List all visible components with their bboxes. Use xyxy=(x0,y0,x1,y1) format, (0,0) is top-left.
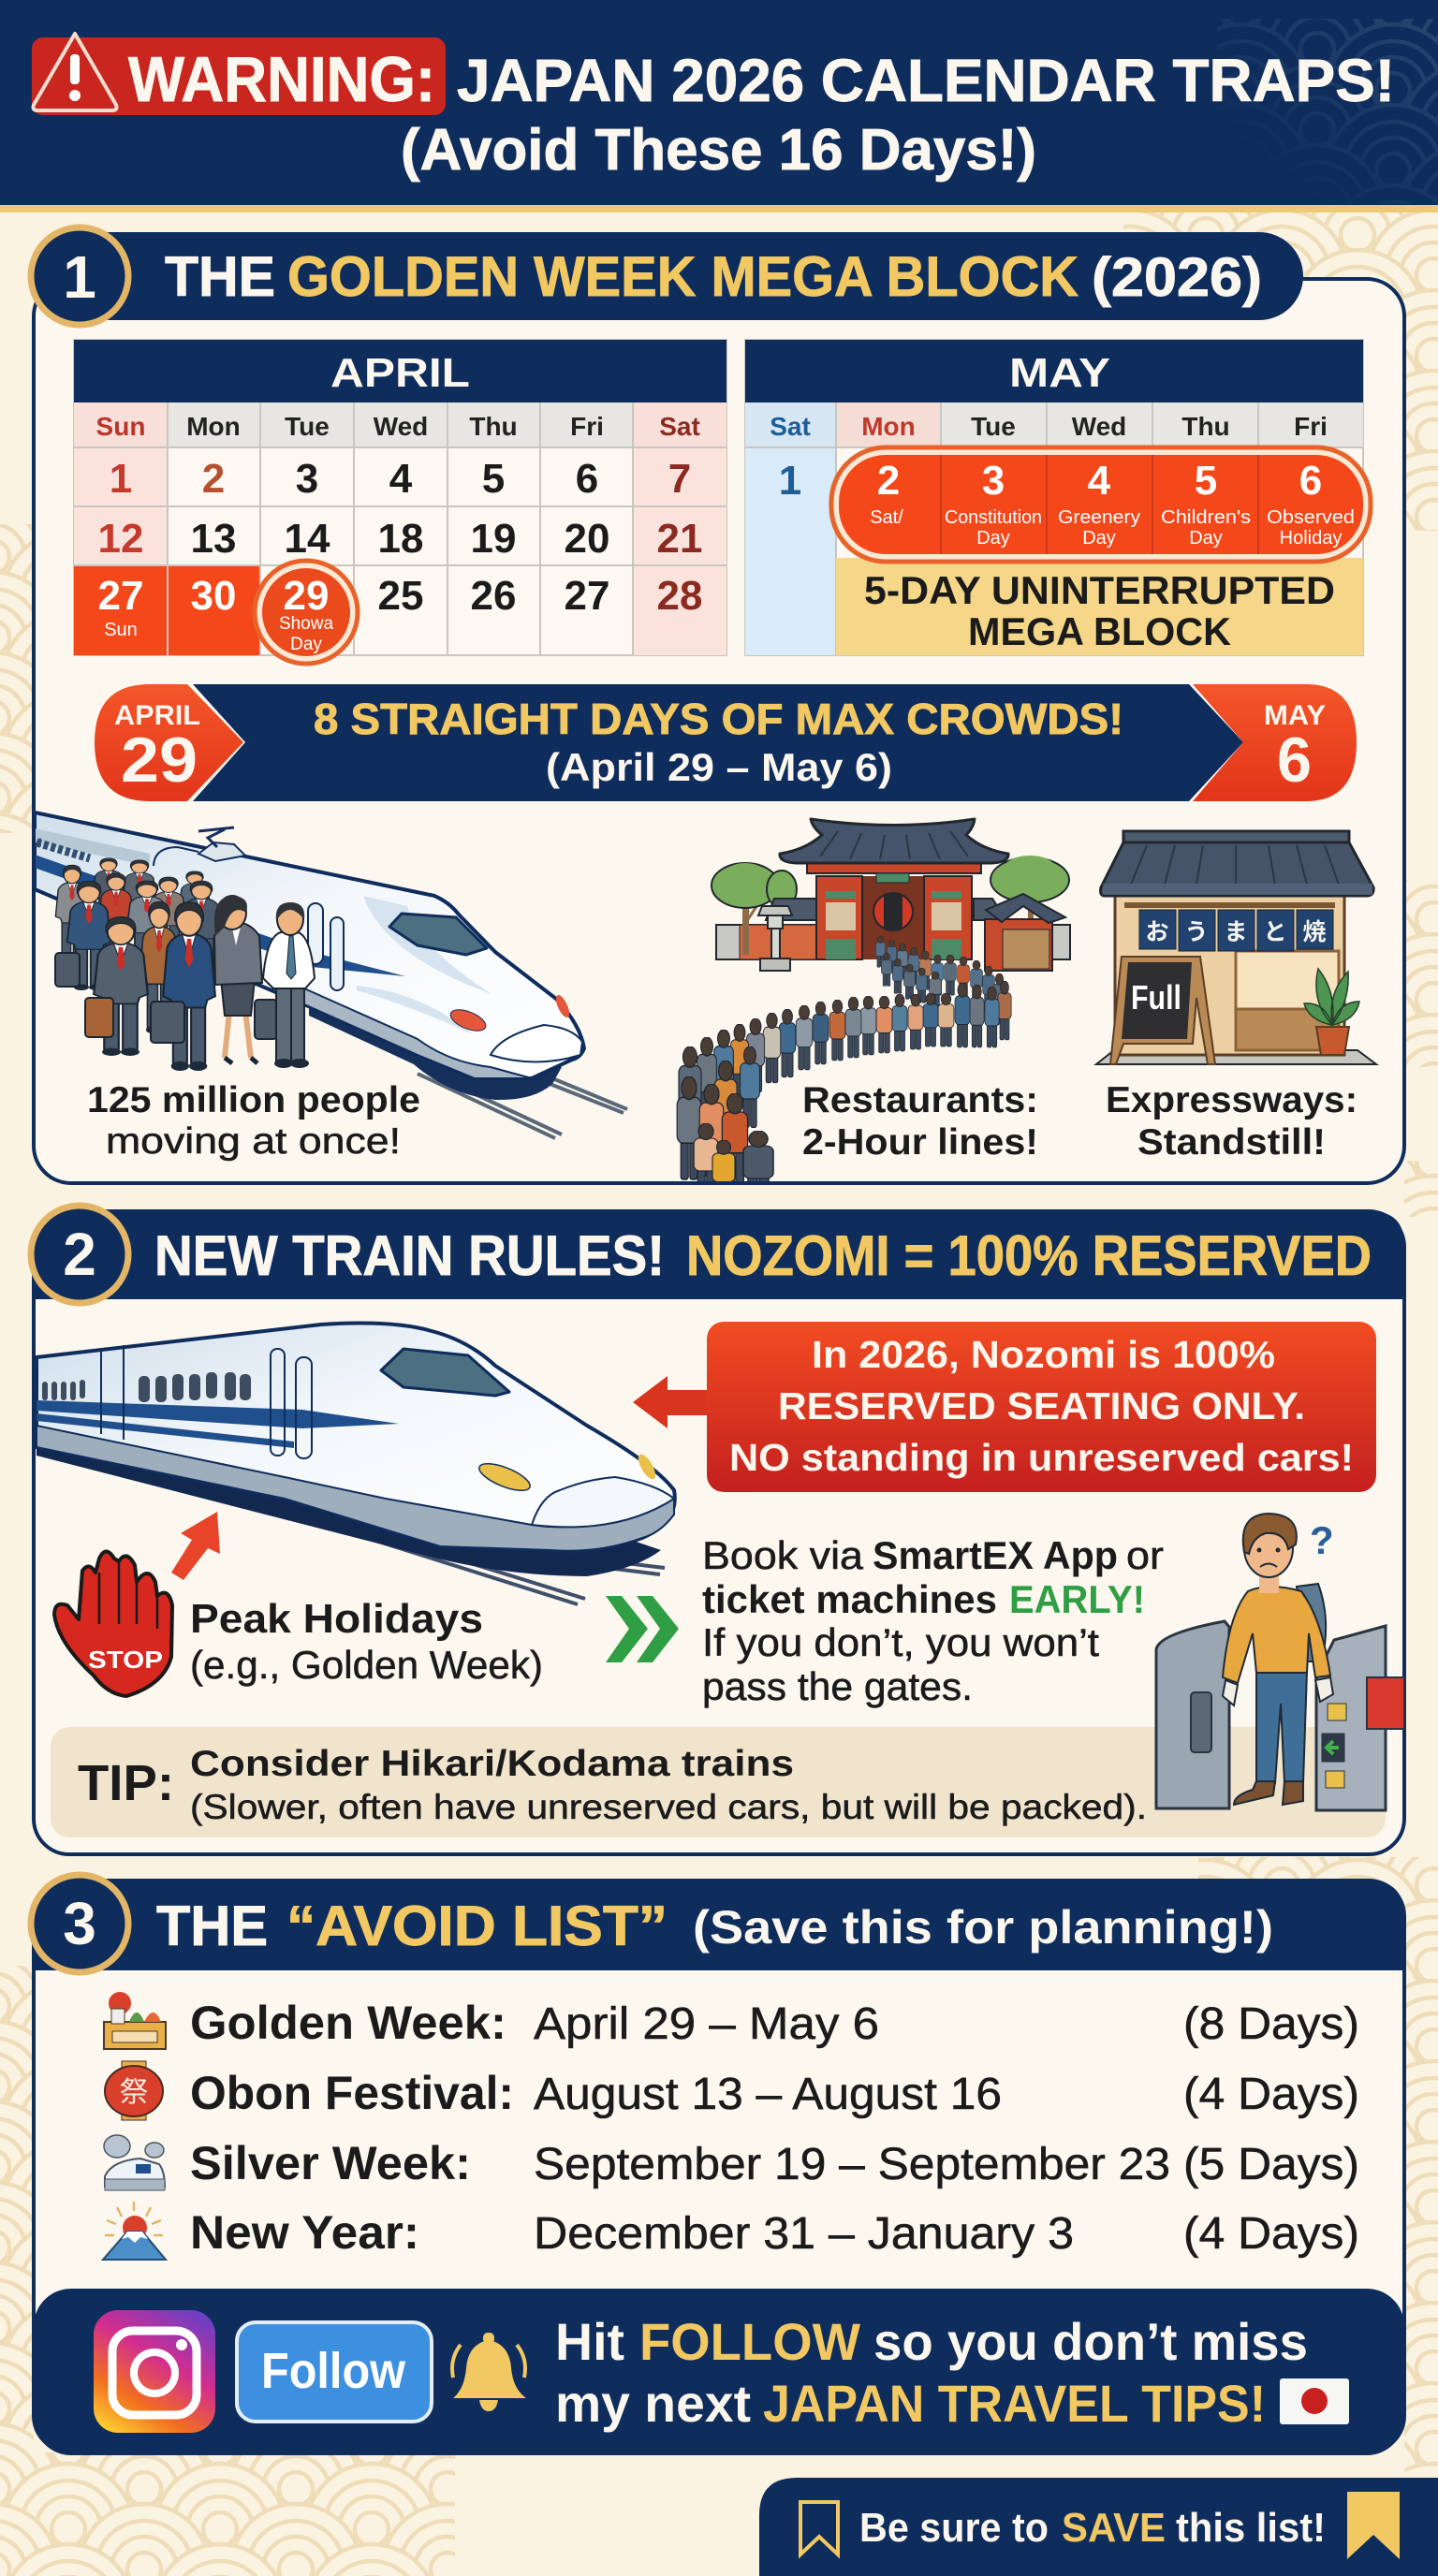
text: booking advice: SmartEX App xyxy=(873,1533,1118,1577)
illustration: nozomi train xyxy=(37,1324,675,1604)
icon: green double chevron xyxy=(606,1596,679,1662)
april calendar: 26 xyxy=(471,573,516,619)
5-day holiday pill: Children's xyxy=(1161,507,1251,528)
april calendar: Sun xyxy=(104,620,138,640)
Full sign board xyxy=(1110,957,1215,1064)
illustration: shinkansen and commuter crowd xyxy=(35,812,627,1138)
5-day holiday pill: Day xyxy=(976,528,1010,549)
april calendar: 1 xyxy=(110,456,132,502)
side hall xyxy=(985,894,1065,971)
april calendar: APRIL xyxy=(330,350,470,396)
5-day holiday pill: Observed xyxy=(1267,507,1355,528)
mega block label: 5-DAY UNINTERRUPTED xyxy=(864,568,1335,612)
caption: 125 million people: 125 million people xyxy=(87,1080,420,1120)
may 6 tag xyxy=(1193,684,1357,801)
april calendar: 2 xyxy=(202,456,225,502)
row: obon festival: Obon Festival: xyxy=(190,2067,514,2119)
row: silver week: (5 Days) xyxy=(1183,2140,1359,2189)
section 1 heading: GOLDEN WEEK MEGA BLOCK xyxy=(287,245,1078,308)
crowd of commuters xyxy=(55,858,315,1071)
tracks xyxy=(418,1070,627,1138)
section 2 heading: NOZOMI = 100% RESERVED xyxy=(686,1224,1372,1287)
section 2 heading xyxy=(31,1206,1404,1303)
mega block label xyxy=(836,558,1363,655)
date range banner: 8 STRAIGHT DAYS OF MAX CROWDS! xyxy=(314,695,1123,743)
april calendar: Thu xyxy=(469,412,518,441)
gate body xyxy=(807,862,981,959)
icon: bento box xyxy=(104,1992,166,2049)
april calendar: 4 xyxy=(389,456,413,502)
follow button: Follow xyxy=(261,2343,406,2399)
row: silver week: Silver Week: xyxy=(190,2137,471,2189)
section 3 heading: (Save this for planning!) xyxy=(693,1901,1273,1954)
text: booking advice: Book via xyxy=(702,1533,864,1577)
text: booking advice: or xyxy=(1126,1533,1164,1577)
follow button xyxy=(237,2322,432,2422)
may calendar: 1 xyxy=(779,458,801,504)
row: obon festival: (4 Days) xyxy=(1183,2070,1359,2119)
save this list bar xyxy=(759,2478,1438,2576)
title line 2: (Avoid These 16 Days!) xyxy=(401,118,1036,183)
noren curtain: う xyxy=(1184,919,1209,945)
may calendar: Thu xyxy=(1181,412,1230,441)
noren curtain: と xyxy=(1263,919,1287,945)
text: peak holidays xyxy=(190,1596,543,1687)
row: golden week xyxy=(104,1992,1359,2049)
row: obon festival xyxy=(105,2061,1359,2120)
5-day holiday pill: 4 xyxy=(1088,458,1111,504)
briefcase xyxy=(85,998,113,1037)
april calendar: 28 xyxy=(657,573,702,619)
briefcase xyxy=(151,1002,184,1043)
follow message: JAPAN TRAVEL TIPS! xyxy=(763,2374,1266,2433)
caption: restaurants xyxy=(802,1080,1038,1163)
panel: section 1 golden week xyxy=(31,227,1404,1205)
section 1 heading: THE xyxy=(165,245,275,308)
caption: 125 million people: moving at once! xyxy=(106,1121,401,1162)
april calendar: 25 xyxy=(378,573,423,619)
temple roof xyxy=(780,819,1008,863)
may calendar: Wed xyxy=(1072,412,1126,441)
april calendar: 20 xyxy=(565,516,609,562)
row: golden week: April 29 – May 6 xyxy=(534,1999,879,2049)
title line 1: WARNING: xyxy=(128,44,435,115)
5-day holiday pill: 6 xyxy=(1299,458,1322,504)
5-day holiday pill: Greenery xyxy=(1058,507,1140,528)
caption: restaurants: 2-Hour lines! xyxy=(802,1122,1038,1163)
icon: stop hand xyxy=(54,1552,172,1696)
follow message: FOLLOW xyxy=(639,2312,860,2371)
april calendar: Wed xyxy=(374,412,428,441)
panel: section 2 train rules xyxy=(31,1206,1404,1854)
follow message: my next xyxy=(555,2374,751,2433)
woman in grey suit xyxy=(214,896,262,1063)
row: silver week: September 19 – September 23 xyxy=(534,2140,1170,2189)
date range banner xyxy=(95,684,1357,801)
5-day holiday pill: Sat/ xyxy=(870,507,903,528)
illustration: temple gate xyxy=(712,819,1070,971)
worried traveller: ? xyxy=(1310,1518,1334,1562)
header banner xyxy=(0,0,1438,212)
caption: 125 million people xyxy=(87,1080,420,1162)
5-day holiday pill: Day xyxy=(1082,528,1116,549)
icon: mount fuji sunrise xyxy=(103,2202,166,2260)
may calendar: Sat xyxy=(770,412,811,441)
text: booking advice: ticket machines xyxy=(702,1577,997,1621)
5-day holiday pill: 5 xyxy=(1195,458,1217,504)
save message: this list! xyxy=(1176,2505,1326,2551)
april calendar: Sat xyxy=(659,412,700,441)
tip box: TIP: xyxy=(78,1755,174,1811)
trees xyxy=(712,856,1069,955)
april calendar: 5 xyxy=(482,456,505,502)
section 3 heading: 3 xyxy=(63,1890,96,1957)
caption: expressways: Standstill! xyxy=(1137,1122,1326,1163)
text: booking advice: EARLY! xyxy=(1009,1577,1145,1621)
date range banner: (April 29 – May 6) xyxy=(546,745,892,789)
ticket gate right xyxy=(1316,1626,1404,1810)
row: silver week xyxy=(104,2135,1359,2190)
Full sign board: Full xyxy=(1131,978,1181,1017)
5-day holiday pill: Holiday xyxy=(1280,528,1342,549)
icon: japan flag xyxy=(1280,2378,1349,2424)
april calendar: 19 xyxy=(471,516,516,562)
may 6 tag: MAY xyxy=(1264,700,1326,731)
callout: reserved seating: NO standing in unreserved cars! xyxy=(729,1436,1354,1479)
ticket gate left xyxy=(1156,1621,1229,1808)
may calendar: MAY xyxy=(1009,350,1110,396)
5-day holiday pill xyxy=(831,447,1371,562)
may calendar xyxy=(745,340,1371,655)
panel: section 3 avoid list xyxy=(31,1875,1404,2452)
april 29 tag xyxy=(95,684,243,801)
section 1 heading xyxy=(31,227,1303,325)
section 3 heading: THE xyxy=(156,1895,268,1957)
april calendar xyxy=(74,340,726,664)
5-day holiday pill: Day xyxy=(1189,528,1223,549)
briefcase xyxy=(255,1000,277,1039)
april calendar: 6 xyxy=(576,456,598,502)
april calendar: 7 xyxy=(668,456,691,502)
5-day holiday pill: Constitution xyxy=(945,507,1042,528)
text: peak holidays: Peak Holidays xyxy=(190,1596,483,1642)
highlighted day 29 Showa Day xyxy=(255,561,358,664)
caption: expressways: Expressways: xyxy=(1106,1080,1357,1120)
section 3 heading xyxy=(31,1875,1404,1972)
5-day holiday pill: 3 xyxy=(982,458,1005,504)
row: new year xyxy=(103,2202,1359,2260)
april calendar: Mon xyxy=(186,412,241,441)
highlighted day 29 Showa Day: 29 xyxy=(284,573,329,619)
illustration: traveller at ticket gates xyxy=(1156,1514,1404,1810)
warning red label xyxy=(32,37,446,115)
icon: warning triangle xyxy=(34,34,116,110)
icon: stop hand: STOP xyxy=(88,1646,163,1674)
row: new year: (4 Days) xyxy=(1183,2209,1359,2259)
april calendar: 30 xyxy=(191,573,236,619)
save message: Be sure to xyxy=(859,2505,1049,2551)
row: new year: New Year: xyxy=(190,2206,419,2259)
may calendar: Fri xyxy=(1294,412,1328,441)
icon: festival lantern xyxy=(105,2061,163,2120)
stone lantern xyxy=(758,906,792,971)
april calendar: 14 xyxy=(285,516,330,562)
worried traveller xyxy=(1223,1514,1334,1805)
icon: festival lantern: 祭 xyxy=(120,2077,148,2108)
icon: gold bookmark xyxy=(1347,2492,1400,2559)
may calendar: Mon xyxy=(861,412,916,441)
april 29 tag: APRIL xyxy=(114,700,200,731)
noren curtain: お xyxy=(1145,919,1169,945)
section 1 heading: (2026) xyxy=(1092,247,1262,308)
april calendar: 27 xyxy=(98,573,143,619)
april calendar: Tue xyxy=(285,412,330,441)
callout: reserved seating: In 2026, Nozomi is 100% xyxy=(812,1333,1275,1376)
save message xyxy=(859,2505,1326,2551)
potted plant xyxy=(1304,969,1359,1055)
callout: reserved seating: RESERVED SEATING ONLY. xyxy=(778,1384,1305,1427)
callout: reserved seating xyxy=(633,1322,1376,1492)
icon: instagram xyxy=(94,2310,215,2433)
may 6 tag: 6 xyxy=(1277,724,1312,796)
side roof xyxy=(766,899,1006,920)
april calendar: Sun xyxy=(96,412,145,441)
highlighted day 29 Showa Day: Showa xyxy=(279,614,333,634)
follow message: so you don’t miss xyxy=(873,2312,1308,2371)
april calendar: 3 xyxy=(296,456,318,502)
april calendar: 13 xyxy=(191,516,236,562)
row: obon festival: August 13 – August 16 xyxy=(534,2070,1002,2119)
noren curtain xyxy=(1139,910,1333,951)
noren curtain: 焼 xyxy=(1302,919,1327,945)
row: golden week: (8 Days) xyxy=(1183,1999,1359,2049)
icon: bell xyxy=(452,2333,526,2411)
april calendar: 27 xyxy=(565,573,609,619)
section 2 heading: 2 xyxy=(63,1221,96,1288)
text: peak holidays: (e.g., Golden Week) xyxy=(190,1643,543,1687)
april calendar: 21 xyxy=(657,516,702,562)
highlighted day 29 Showa Day: Day xyxy=(290,635,322,654)
5-day holiday pill: 2 xyxy=(877,458,900,504)
text: booking advice: pass the gates. xyxy=(702,1664,973,1708)
april calendar: Fri xyxy=(570,412,604,441)
temple walls xyxy=(716,925,816,959)
noren curtain: ま xyxy=(1224,919,1248,945)
arrow: to train xyxy=(171,1512,220,1580)
icon: bookmark outline xyxy=(800,2502,838,2554)
tip box: (Slower, often have unreserved cars, but will be packed). xyxy=(190,1788,1147,1826)
text: booking advice: If you don’t, you won’t xyxy=(702,1620,1099,1664)
header banner: JAPAN 2026 CALENDAR TRAPS! xyxy=(457,47,1395,114)
man in white shirt xyxy=(263,902,315,1068)
row: golden week: Golden Week: xyxy=(190,1997,506,2049)
caption: expressways xyxy=(1106,1080,1357,1163)
tip box: Consider Hikari/Kodama trains xyxy=(190,1744,794,1784)
april calendar: 12 xyxy=(98,516,143,562)
section 2 heading: NEW TRAIN RULES! xyxy=(154,1224,665,1287)
follow message xyxy=(555,2312,1308,2433)
illustration: winding queue of people xyxy=(677,936,1011,1205)
briefcase xyxy=(55,953,80,987)
section 3 heading: “AVOID LIST” xyxy=(286,1895,668,1957)
follow call to action bar xyxy=(34,2289,1404,2455)
may calendar: Tue xyxy=(971,412,1016,441)
caption: restaurants: Restaurants: xyxy=(802,1080,1038,1120)
april 29 tag: 29 xyxy=(121,724,198,796)
tip box xyxy=(51,1727,1386,1837)
train xyxy=(35,812,584,1100)
icon: train and clouds xyxy=(104,2135,165,2190)
row: new year: December 31 – January 3 xyxy=(534,2209,1074,2259)
save message: SAVE xyxy=(1062,2505,1166,2551)
follow message: Hit xyxy=(555,2312,624,2371)
text: booking advice xyxy=(702,1533,1164,1708)
mega block label: MEGA BLOCK xyxy=(968,609,1231,653)
april calendar: 18 xyxy=(378,516,423,562)
illustration: full restaurant shop xyxy=(1096,831,1376,1064)
section 1 heading: 1 xyxy=(63,243,96,311)
